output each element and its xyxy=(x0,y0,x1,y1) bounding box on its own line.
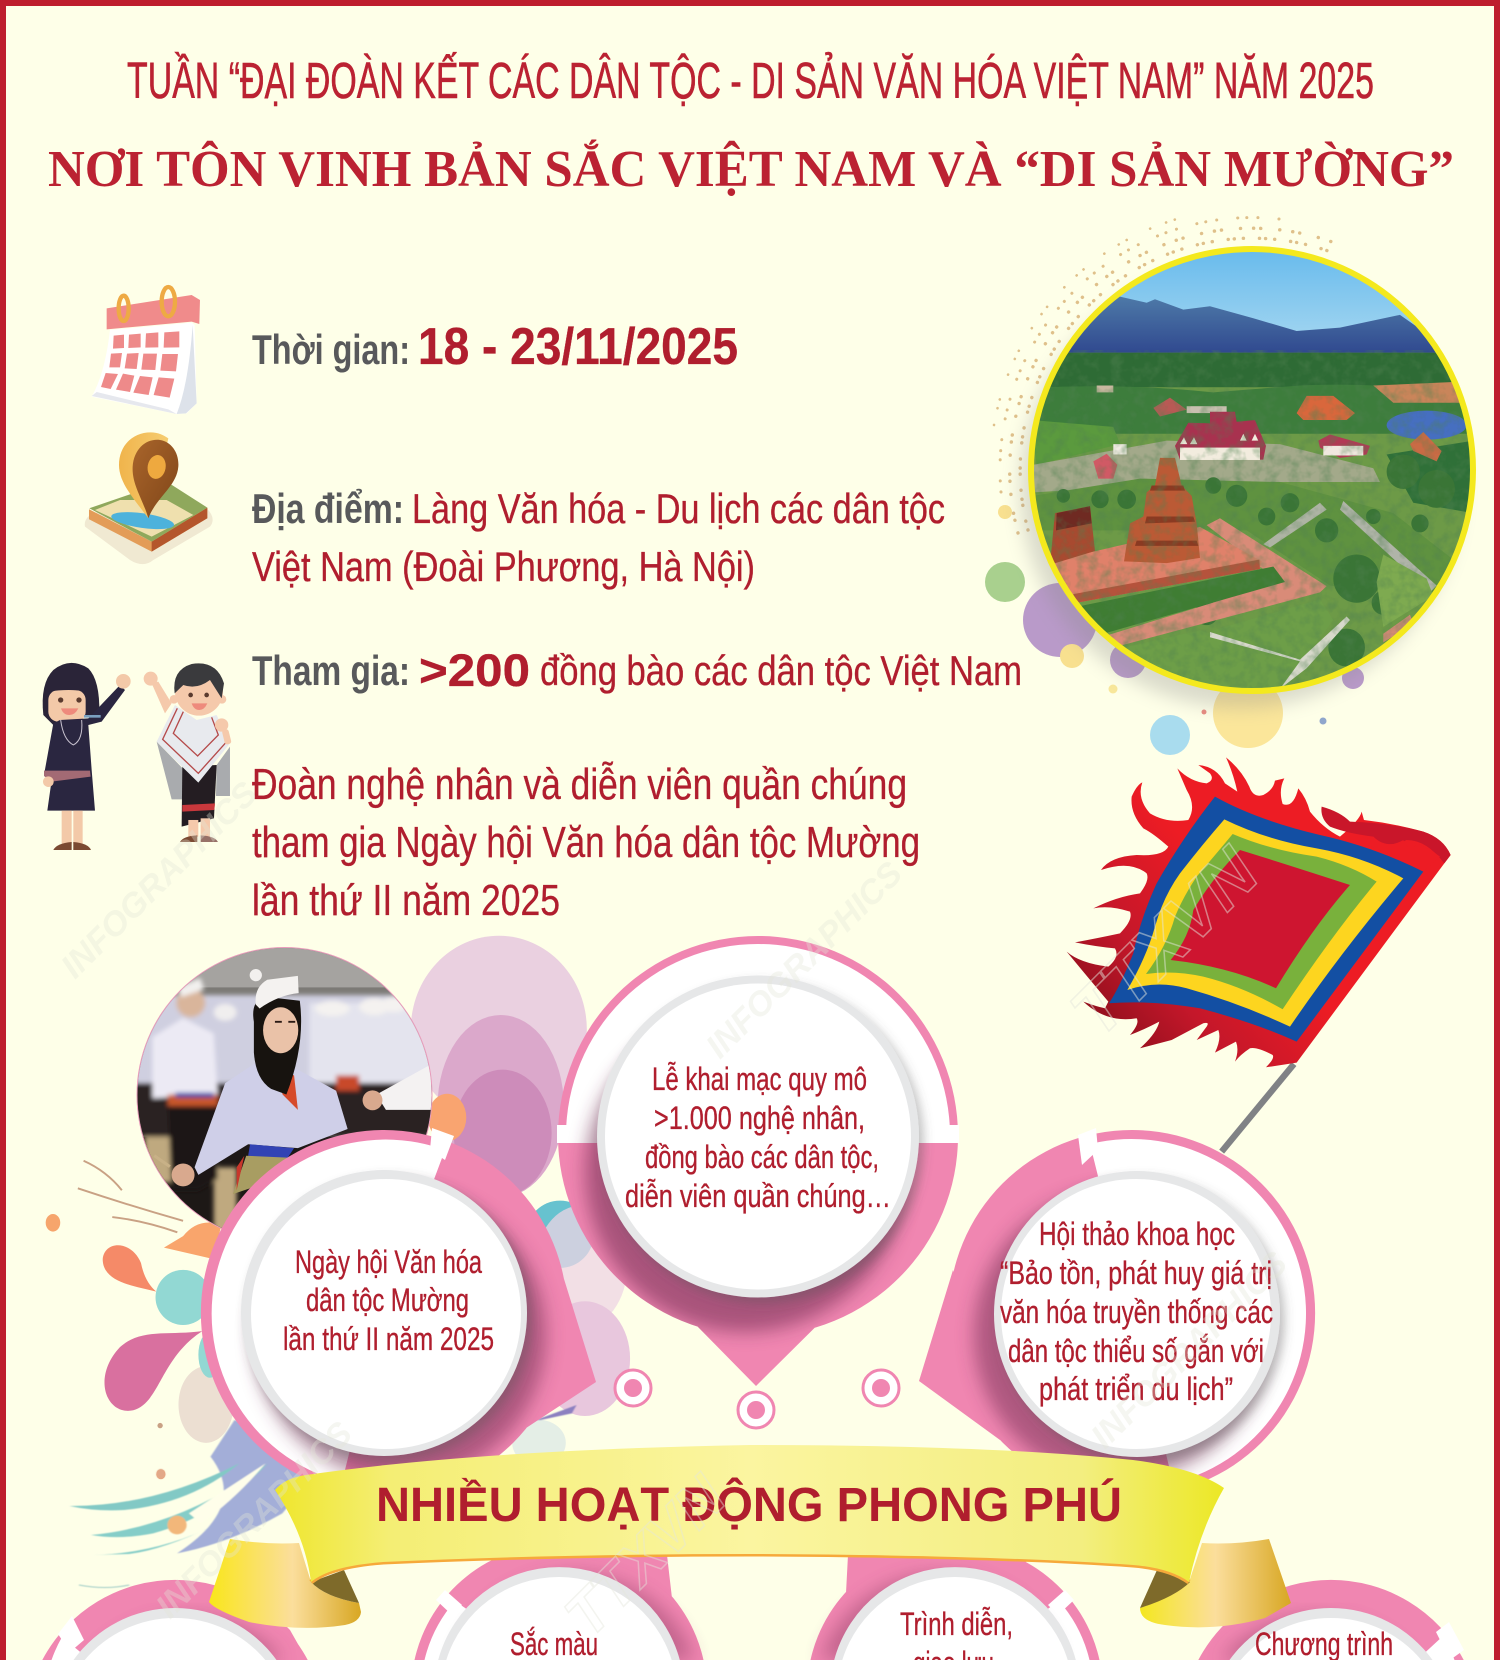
label: participants: Tham gia: xyxy=(252,647,410,694)
label: location: Địa điểm: xyxy=(252,485,404,532)
callout text xyxy=(625,1061,891,1214)
decorative bubbles and stars around village photo xyxy=(985,217,1460,755)
callout text: dân tộc Mường xyxy=(306,1282,469,1318)
callout text: phát triển du lịch” xyxy=(1039,1371,1233,1407)
photo: ethnic culture village aerial xyxy=(1028,246,1476,694)
photo: Muong girl dancing xyxy=(136,947,432,1229)
bottom circle 2: colours xyxy=(414,1544,704,1660)
decorative paint splash left xyxy=(46,1161,234,1479)
left ribbon fold xyxy=(311,1570,359,1603)
ribbon banner xyxy=(209,1445,1291,1628)
bullet target left xyxy=(615,1370,651,1406)
decorative brush strokes xyxy=(69,1405,577,1587)
callout text: dân tộc thiểu số gắn với xyxy=(1008,1333,1264,1369)
callout text: Ngày hội Văn hóa xyxy=(295,1244,482,1280)
callout text xyxy=(1000,1216,1273,1407)
flag with flame border xyxy=(1067,757,1451,1152)
watermarks: TTXVN xyxy=(552,1462,739,1649)
right ribbon fold xyxy=(1140,1570,1190,1608)
flag red centre xyxy=(1171,850,1350,988)
flag blue band xyxy=(1109,797,1423,1042)
left ribbon tail xyxy=(209,1539,361,1628)
icon: map pin xyxy=(85,432,213,564)
title line 2: NƠI TÔN VINH BẢN SẮC VIỆT NAM VÀ “DI SẢN MƯỜNG” xyxy=(48,138,1454,198)
banner body xyxy=(275,1445,1224,1582)
banner heading: NHIỀU HOẠT ĐỘNG PHONG PHÚ xyxy=(376,1477,1122,1532)
bottom circle 1 xyxy=(42,1580,308,1660)
text block: delegation line 3: lần thứ II năm 2025 xyxy=(252,876,560,925)
banner underside xyxy=(311,1554,1189,1582)
callout text: Lễ khai mạc quy mô xyxy=(652,1061,867,1097)
callout text: đồng bào các dân tộc, xyxy=(645,1139,879,1175)
flag green band xyxy=(1146,834,1377,1009)
value: location line 2: Việt Nam (Đoài Phương, Hà Nội) xyxy=(252,543,755,590)
top-right flag tip detail xyxy=(1321,807,1451,863)
icon: two people in ethnic costume xyxy=(43,663,232,850)
callout text: “Bảo tồn, phát huy giá trị xyxy=(1000,1255,1272,1291)
callout: Muong festival xyxy=(201,1128,596,1496)
callout: opening ceremony xyxy=(557,936,959,1386)
watermarks xyxy=(54,774,1295,1649)
label: time: Thời gian: xyxy=(252,326,410,373)
bottom circle 3: performances xyxy=(810,1544,1100,1660)
bullet target centre xyxy=(738,1392,774,1428)
flag pole xyxy=(1222,1064,1294,1152)
callout text: >1.000 nghệ nhân, xyxy=(654,1100,865,1136)
decorative pink petals behind circles xyxy=(411,936,630,1466)
right ribbon tail xyxy=(1140,1539,1291,1627)
watermarks: INFOGRAPHICS xyxy=(54,774,265,986)
value: participants text: đồng bào các dân tộc Việt Nam xyxy=(540,647,1022,694)
text block: delegation line 1: Đoàn nghệ nhân và diễn viên quần chúng xyxy=(252,760,907,809)
bottom circle 4: programme xyxy=(1198,1580,1464,1660)
callout text: diễn viên quần chúng… xyxy=(625,1178,891,1214)
watermarks: TTXVN xyxy=(1055,832,1274,1051)
watermarks: INFOGRAPHICS xyxy=(149,1414,360,1626)
callout text: Hội thảo khoa học xyxy=(1039,1216,1235,1252)
icon: calendar xyxy=(92,287,200,414)
watermarks: INFOGRAPHICS xyxy=(1084,1244,1295,1456)
value: location line 1: Làng Văn hóa - Du lịch các dân tộc xyxy=(412,485,945,532)
flame field xyxy=(1067,757,1451,1067)
value: participants number: >200 xyxy=(419,645,530,696)
callout text xyxy=(283,1244,494,1357)
callout text: lần thứ II năm 2025 xyxy=(283,1321,494,1357)
bullet target right xyxy=(863,1370,899,1406)
text block: delegation line 2: tham gia Ngày hội Văn hóa dân tộc Mường xyxy=(252,818,920,867)
circle text: Trình diễn, xyxy=(900,1606,1013,1642)
callout text: văn hóa truyền thống các xyxy=(1000,1294,1273,1330)
flag yellow band xyxy=(1127,819,1403,1027)
value: date: 18 - 23/11/2025 xyxy=(418,318,738,376)
watermarks: INFOGRAPHICS xyxy=(699,854,910,1066)
callout: scientific conference xyxy=(919,1128,1315,1496)
